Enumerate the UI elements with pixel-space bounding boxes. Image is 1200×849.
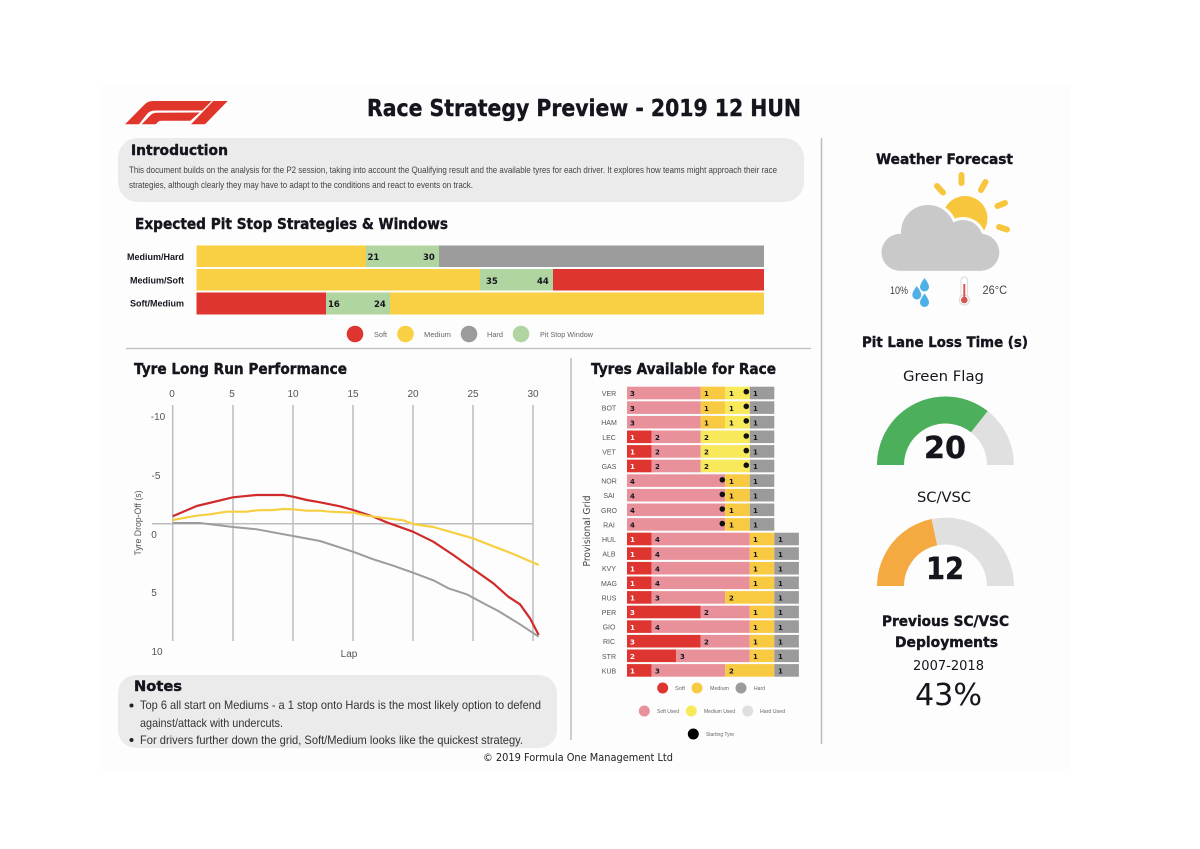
- chart grid: [152, 405, 533, 641]
- row: VET: 2: [655, 449, 660, 457]
- row: GRO: 1: [729, 507, 734, 515]
- row: KUB: [602, 664, 799, 677]
- row: VER: 1: [753, 390, 758, 398]
- row: HAM: HAM: [601, 420, 617, 427]
- row: ALB: [602, 547, 799, 560]
- row: RIC: 3: [630, 638, 635, 646]
- row: GIO: [603, 620, 799, 633]
- row: KVY: 1: [753, 565, 758, 573]
- row: HUL: HUL: [602, 537, 616, 544]
- heading: introduction: Introduction: [131, 143, 228, 159]
- row: VET: 2: [704, 449, 709, 457]
- bar: medium/soft: [130, 269, 764, 290]
- logo: F1: [125, 101, 228, 124]
- heading: previous deployments: [882, 614, 1009, 651]
- panel: introduction: [118, 138, 804, 202]
- stat: deployment rate: 43%: [915, 678, 982, 713]
- row: SAI: 1: [753, 492, 758, 500]
- legend: tyres: Medium: [710, 686, 729, 692]
- row: GAS: 1: [630, 463, 635, 471]
- row: RIC: 1: [778, 638, 783, 646]
- row: KVY: KVY: [602, 566, 616, 573]
- bar: medium/hard: [127, 246, 764, 267]
- legend: pit stop chart: Hard: [487, 332, 503, 339]
- legend: tyres: Soft: [675, 686, 685, 692]
- row: HAM: 1: [729, 419, 734, 427]
- text: notes list: against/attack with undercuts.: [140, 716, 283, 730]
- label: sc/vsc: SC/VSC: [917, 490, 971, 506]
- text: notes list: Top 6 all start on Mediums - a 1 stop onto Hards is the most likely option to defend: [140, 698, 541, 712]
- heading: pit lane loss: Pit Lane Loss Time (s): [862, 335, 1028, 351]
- row: GAS: 2: [704, 463, 709, 471]
- line: hard tyre: [173, 523, 539, 637]
- row: SAI: 4: [630, 492, 635, 500]
- row: STR: 1: [753, 653, 758, 661]
- legend: tyres: Medium Used: [704, 709, 735, 715]
- row: STR: 3: [680, 653, 685, 661]
- x axis labels: [169, 389, 539, 660]
- row: PER: 3: [630, 609, 635, 617]
- row: NOR: [601, 474, 774, 487]
- row: ALB: 1: [753, 551, 758, 559]
- row: VET: VET: [602, 449, 617, 456]
- x axis labels: 30: [527, 389, 539, 400]
- row: SAI: SAI: [603, 493, 615, 500]
- x axis labels: 0: [169, 389, 175, 400]
- row: PER: PER: [602, 610, 616, 617]
- row: ALB: 4: [655, 551, 660, 559]
- row: GRO: 4: [630, 507, 635, 515]
- row: PER: [602, 606, 799, 618]
- gauge: sc/vsc: 12: [926, 552, 964, 587]
- bar: medium/hard: 21: [368, 253, 379, 263]
- row: VER: 1: [729, 390, 734, 398]
- row: HAM: 1: [753, 419, 758, 427]
- y axis labels: -10: [151, 412, 166, 423]
- gauge: green flag: 20: [924, 431, 966, 466]
- row: LEC: LEC: [602, 435, 616, 442]
- row: RUS: 1: [778, 595, 783, 603]
- row: HAM: 1: [704, 419, 709, 427]
- row: LEC: [602, 430, 774, 443]
- row: GAS: [602, 460, 774, 472]
- row: RUS: RUS: [602, 595, 617, 602]
- text: introduction body: [129, 165, 777, 191]
- bar: soft/medium: 16: [328, 300, 340, 310]
- row: KUB: 1: [630, 668, 635, 676]
- row: ALB: 1: [630, 551, 635, 559]
- row: MAG: MAG: [601, 581, 617, 588]
- row: LEC: 1: [753, 434, 758, 442]
- row: GIO: 4: [655, 624, 660, 632]
- legend: pit stop chart: Pit Stop Window: [540, 332, 594, 339]
- y axis labels: 0: [151, 530, 157, 541]
- row: GAS: 1: [753, 463, 758, 471]
- bar: medium/soft: 44: [537, 277, 549, 287]
- chart: pit stop strategy bars: [127, 246, 764, 314]
- chart: tyres available for race: [582, 387, 799, 677]
- heading: tyre long run: Tyre Long Run Performance: [134, 360, 347, 378]
- axis label: provisional grid: Provisional Grid: [582, 496, 593, 566]
- row: KVY: 4: [655, 565, 660, 573]
- row: VER: 1: [704, 390, 709, 398]
- heading: previous deployments: Deployments: [895, 635, 998, 651]
- legend: tyres: Starting Tyre: [706, 732, 734, 738]
- row: LEC: 2: [655, 434, 660, 442]
- row: NOR: 1: [753, 478, 758, 486]
- y axis labels: 5: [151, 588, 157, 599]
- legend: tyres: Hard Used: [760, 709, 785, 715]
- row: VET: 1: [630, 449, 635, 457]
- icon: rain drops: [912, 278, 929, 307]
- legend: tyres: Hard: [754, 686, 765, 692]
- row: KUB: KUB: [602, 668, 617, 675]
- row: ALB: 1: [778, 551, 783, 559]
- row: HUL: 1: [778, 536, 783, 544]
- row: VET: [602, 445, 774, 458]
- bar: soft/medium: Soft/Medium: [130, 298, 184, 308]
- row: MAG: [601, 576, 799, 589]
- row: HUL: 1: [630, 536, 635, 544]
- row: VET: 1: [753, 449, 758, 457]
- row: RIC: 2: [704, 638, 709, 646]
- row: GIO: 1: [753, 624, 758, 632]
- row: RUS: 2: [729, 595, 734, 603]
- row: RIC: 1: [753, 638, 758, 646]
- row: GRO: GRO: [601, 508, 618, 515]
- bar: medium/hard: Medium/Hard: [127, 252, 184, 262]
- y axis labels: -5: [152, 471, 161, 482]
- row: PER: 1: [778, 609, 783, 617]
- row: HAM: [601, 416, 774, 428]
- row: HUL: [602, 533, 799, 545]
- legend: tyres: [639, 682, 785, 740]
- copyright: © 2019 Formula One Management Ltd: [483, 752, 673, 764]
- heading: notes: Notes: [134, 679, 182, 695]
- row: GAS: GAS: [602, 464, 617, 471]
- row: LEC: 2: [704, 434, 709, 442]
- row: NOR: 4: [630, 478, 635, 486]
- row: BOT: [602, 401, 774, 414]
- x axis labels: Lap: [341, 649, 358, 660]
- icon: sun and cloud: [882, 175, 1007, 274]
- row: GIO: 1: [630, 624, 635, 632]
- title: Race Strategy Preview - 2019 12 HUN: [367, 96, 801, 122]
- y axis labels: 10: [151, 647, 163, 658]
- text: temperature: 26°C: [982, 285, 1007, 297]
- row: RIC: [603, 635, 799, 648]
- row: RAI: [603, 518, 774, 531]
- text: notes list: [130, 698, 541, 747]
- row: KUB: 1: [778, 668, 783, 676]
- row: KVY: 1: [630, 565, 635, 573]
- row: KVY: [602, 562, 799, 574]
- legend: pit stop chart: [347, 326, 594, 342]
- row: SAI: [603, 489, 774, 502]
- row: HUL: 4: [655, 536, 660, 544]
- bar: medium/hard: 30: [423, 253, 435, 263]
- x axis labels: 20: [407, 389, 419, 400]
- row: MAG: 1: [778, 580, 783, 588]
- bar: soft/medium: [130, 292, 764, 314]
- label: green flag: Green Flag: [903, 369, 984, 385]
- heading: weather forecast: Weather Forecast: [876, 152, 1013, 168]
- heading: pit stop strategies: Expected Pit Stop Strategies & Windows: [135, 215, 448, 233]
- legend: tyres: Soft Used: [657, 709, 679, 715]
- heading: previous deployments: Previous SC/VSC: [882, 614, 1009, 630]
- row: STR: 2: [630, 653, 635, 661]
- row: RAI: 1: [753, 522, 758, 530]
- row: GRO: 1: [753, 507, 758, 515]
- row: VER: VER: [602, 391, 616, 398]
- line: medium tyre: [173, 509, 539, 565]
- text: introduction body: This document builds on the analysis for the P2 session, taking into account the Qualifying result and the available tyres for each driver. It explores how teams might approach their race: [129, 165, 777, 176]
- row: STR: 1: [778, 653, 783, 661]
- label: years: 2007-2018: [913, 659, 984, 674]
- row: RUS: [602, 591, 799, 604]
- heading: tyres available: Tyres Available for Race: [591, 360, 776, 378]
- text: notes list: For drivers further down the grid, Soft/Medium looks like the quickest strategy.: [140, 733, 523, 747]
- gauge: sc/vsc: [877, 518, 1014, 587]
- x axis labels: 25: [467, 389, 479, 400]
- row: BOT: 1: [729, 405, 734, 413]
- row: BOT: 3: [630, 405, 635, 413]
- row: MAG: 1: [630, 580, 635, 588]
- row: NOR: NOR: [601, 479, 617, 486]
- line: soft tyre: [173, 495, 539, 635]
- row: STR: STR: [602, 654, 616, 661]
- row: NOR: 1: [729, 478, 734, 486]
- row: HUL: 1: [753, 536, 758, 544]
- legend: pit stop chart: Medium: [424, 332, 451, 339]
- text: rain chance: 10%: [890, 285, 908, 297]
- panel: notes: [118, 675, 557, 748]
- row: GRO: [601, 504, 774, 516]
- gauge: green flag: [877, 396, 1014, 466]
- row: PER: 2: [704, 609, 709, 617]
- text: introduction body: strategies, although clearly they may have to adapt to the conditions and react to events on track.: [129, 180, 473, 191]
- legend: pit stop chart: Soft: [374, 332, 387, 339]
- row: GAS: 2: [655, 463, 660, 471]
- row: KVY: 1: [778, 565, 783, 573]
- row: GIO: 1: [778, 624, 783, 632]
- bar: medium/soft: 35: [486, 277, 498, 287]
- row: SAI: 1: [729, 492, 734, 500]
- y axis labels: [133, 412, 166, 658]
- bar: soft/medium: 24: [374, 300, 386, 310]
- row: MAG: 4: [655, 580, 660, 588]
- row: BOT: BOT: [602, 406, 617, 413]
- row: PER: 1: [753, 609, 758, 617]
- row: RAI: 1: [729, 522, 734, 530]
- row: LEC: 1: [630, 434, 635, 442]
- row: GIO: GIO: [603, 625, 616, 632]
- x axis labels: 5: [229, 389, 235, 400]
- row: ALB: ALB: [602, 552, 616, 559]
- row: MAG: 1: [753, 580, 758, 588]
- row: RAI: 4: [630, 522, 635, 530]
- y axis labels: Tyre Drop-Off (s): [133, 490, 144, 556]
- icon: thermometer: [959, 277, 969, 305]
- chart: tyre long run performance: [133, 389, 539, 660]
- bar: medium/soft: Medium/Soft: [130, 276, 184, 286]
- row: HAM: 3: [630, 419, 635, 427]
- x axis labels: 15: [347, 389, 359, 400]
- row: RIC: RIC: [603, 639, 615, 646]
- row: VER: 3: [630, 390, 635, 398]
- row: BOT: 1: [753, 405, 758, 413]
- row: KUB: 3: [655, 668, 660, 676]
- row: KUB: 2: [729, 668, 734, 676]
- row: RUS: 1: [630, 595, 635, 603]
- x axis labels: 10: [287, 389, 299, 400]
- row: BOT: 1: [704, 405, 709, 413]
- row: VER: [602, 387, 774, 399]
- row: STR: [602, 650, 799, 662]
- row: RUS: 3: [655, 595, 660, 603]
- row: RAI: RAI: [603, 522, 615, 529]
